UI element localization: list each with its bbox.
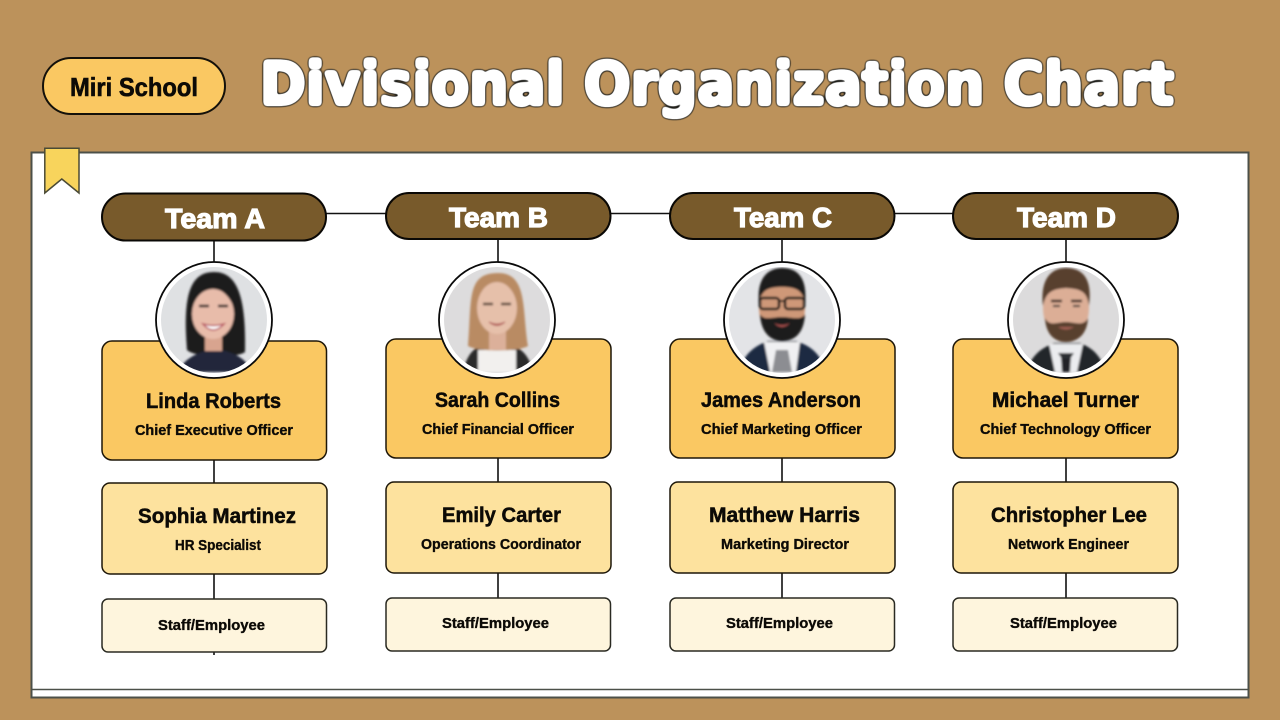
card: Sarah Collins: Sarah Collins (435, 388, 560, 412)
card: Christopher Lee: Christopher Lee (991, 503, 1147, 527)
card: Matthew Harris: Marketing Director (721, 537, 849, 553)
card: Sophia Martinez: HR Specialist (175, 538, 261, 554)
card: Michael Turner: Chief Technology Officer (980, 422, 1151, 438)
column: Team A (102, 194, 327, 652)
column: Team C (670, 193, 895, 651)
team header A: Team A (165, 203, 265, 234)
card: Linda Roberts: Linda Roberts (146, 389, 281, 413)
card: James Anderson: James Anderson (701, 388, 861, 412)
card: Staff A (102, 599, 326, 652)
card: Emily Carter (386, 482, 611, 573)
portrait: James Anderson (724, 262, 840, 378)
panel: chart sheet (31, 152, 1249, 698)
card: Staff B: Staff/Employee (442, 616, 549, 632)
team header B: Team B (449, 202, 548, 233)
team header A (102, 194, 326, 240)
card: Staff D (953, 598, 1178, 651)
card: Staff C: Staff/Employee (726, 616, 833, 632)
card: Linda Roberts (102, 341, 326, 460)
team header D (953, 193, 1178, 239)
team header B (386, 193, 610, 239)
card: Christopher Lee: Network Engineer (1008, 537, 1129, 553)
card: Michael Turner (953, 339, 1178, 458)
card: Staff A: Staff/Employee (158, 618, 265, 634)
team header C (670, 193, 894, 239)
portrait: Sarah Collins (439, 262, 555, 378)
badge: Miri School (43, 58, 225, 114)
card: Michael Turner: Michael Turner (992, 388, 1140, 412)
card: Staff C (670, 598, 894, 651)
card: Sarah Collins (386, 339, 611, 458)
card: Emily Carter: Operations Coordinator (421, 537, 581, 553)
card: Staff B (386, 598, 610, 651)
card: Matthew Harris (670, 482, 895, 573)
team header C: Team C (734, 202, 832, 233)
card: James Anderson (670, 339, 895, 458)
icon: bookmark ribbon (45, 148, 79, 193)
card: James Anderson: Chief Marketing Officer (701, 422, 862, 438)
card: Emily Carter: Emily Carter (442, 503, 562, 527)
column: Team D (953, 193, 1178, 651)
card: Staff D: Staff/Employee (1010, 616, 1117, 632)
card: Sophia Martinez (102, 483, 327, 574)
card: Sarah Collins: Chief Financial Officer (422, 422, 574, 438)
card: Linda Roberts: Chief Executive Officer (135, 423, 293, 439)
badge: Miri School: Miri School (70, 72, 198, 102)
card: Christopher Lee (953, 482, 1178, 573)
card: Matthew Harris: Matthew Harris (709, 503, 860, 527)
portrait: Linda Roberts (156, 262, 272, 378)
column: Team B (386, 193, 611, 651)
title: Divisional Organization Chart (260, 50, 1174, 120)
portrait: Michael Turner (1008, 262, 1124, 378)
team header D: Team D (1017, 202, 1116, 233)
card: Sophia Martinez: Sophia Martinez (138, 504, 296, 528)
connector lines (214, 214, 1066, 655)
